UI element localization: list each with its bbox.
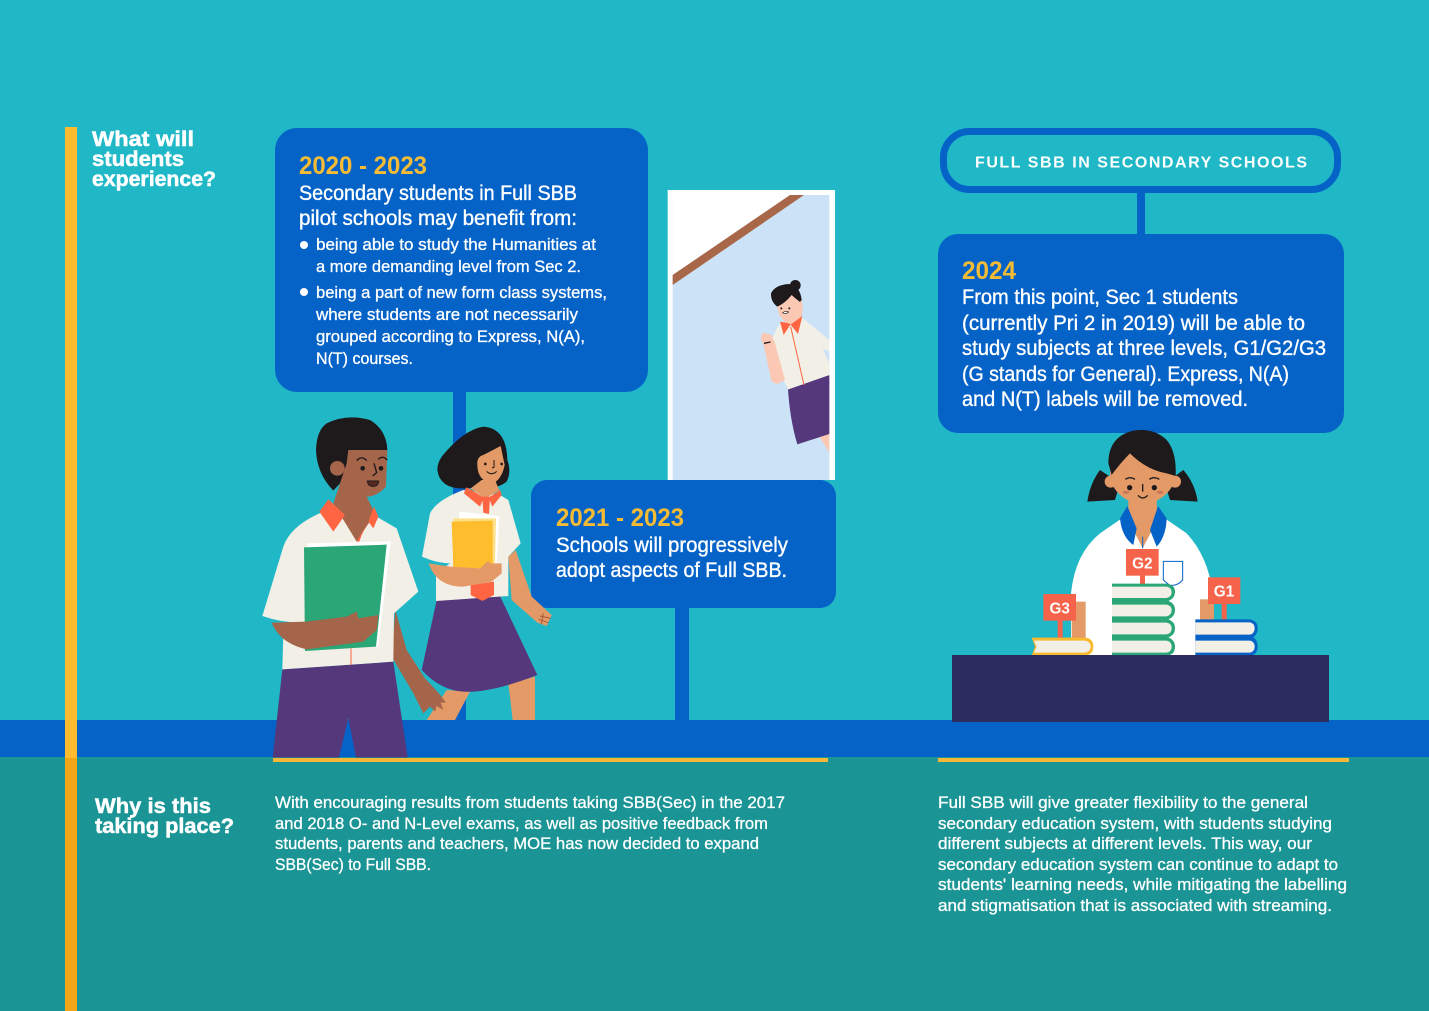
text block: reason for expansion: With encouraging results from students taking SBB(Sec) in the 2017 <box>275 793 785 812</box>
girl student <box>422 427 552 720</box>
callout: 2020 - 2023: a more demanding level from Sec 2. <box>316 257 581 276</box>
book stack G2 <box>1112 549 1175 656</box>
boy student <box>262 417 446 757</box>
text block: benefits of full SBB: secondary education system can continue to adapt to <box>938 855 1338 874</box>
desk <box>952 655 1329 722</box>
pill: full SBB in secondary schools: FULL SBB IN SECONDARY SCHOOLS <box>975 154 1307 172</box>
callout: 2024: 2024 <box>962 257 1016 285</box>
callout: 2024: and N(T) labels will be removed. <box>962 388 1248 411</box>
illustration: student with book stacks <box>1032 430 1258 656</box>
heading: why is this taking place: Why is this <box>95 795 211 818</box>
callout: 2020 - 2023: grouped according to Express, N(A), <box>316 327 585 346</box>
callout: 2021 - 2023: 2021 - 2023 <box>556 504 684 532</box>
book stack G3 <box>1032 594 1093 656</box>
callout: 2021 - 2023: adopt aspects of Full SBB. <box>556 559 787 582</box>
text block: reason for expansion <box>275 793 785 874</box>
heading: why is this taking place: taking place? <box>95 815 234 838</box>
callout: 2020 - 2023 <box>275 128 648 392</box>
text block: reason for expansion: SBB(Sec) to Full SBB. <box>275 855 431 874</box>
text block: reason for expansion: students, parents and teachers, MOE has now decided to expand <box>275 834 759 853</box>
callout: 2020 - 2023: Secondary students in Full SBB <box>299 182 577 205</box>
callout: 2020 - 2023: 2020 - 2023 <box>299 152 427 180</box>
connector: second callout to timeline <box>675 600 689 725</box>
text block: reason for expansion: and 2018 O- and N-Level exams, as well as positive feedback from <box>275 814 768 833</box>
callout: 2021 - 2023 <box>531 480 836 608</box>
vertical yellow rule <box>65 127 77 1011</box>
text block: benefits of full SBB: secondary education system, with students studying <box>938 814 1332 833</box>
text block: benefits of full SBB <box>938 793 1347 915</box>
callout: 2020 - 2023: being a part of new form class systems, <box>316 283 607 302</box>
heading: what will students experience: students <box>92 148 184 171</box>
pill: full SBB in secondary schools <box>944 132 1338 190</box>
callout: 2021 - 2023: Schools will progressively <box>556 534 788 557</box>
book stack G3: G3 <box>1049 600 1070 617</box>
bottom accent line right <box>938 758 1349 762</box>
connector: pill to 2024 callout <box>1137 188 1145 238</box>
heading: what will students experience <box>92 128 216 191</box>
book stack G1 <box>1195 577 1258 656</box>
heading: why is this taking place <box>95 795 234 838</box>
illustration: window with teacher <box>668 190 835 480</box>
callout: 2024: (currently Pri 2 in 2019) will be able to <box>962 312 1305 335</box>
callout: 2020 - 2023: N(T) courses. <box>316 349 413 368</box>
callout: 2020 - 2023: pilot schools may benefit from: <box>299 207 577 230</box>
girl with pigtails <box>1071 430 1214 655</box>
callout: 2020 - 2023: where students are not necessarily <box>315 305 578 324</box>
timeline band <box>0 720 1429 757</box>
text block: benefits of full SBB: students' learning needs, while mitigating the labelling <box>938 875 1347 894</box>
text block: benefits of full SBB: Full SBB will give greater flexibility to the general <box>938 793 1308 812</box>
text block: benefits of full SBB: different subjects at different levels. This way, our <box>938 834 1312 853</box>
heading: what will students experience: experience? <box>92 168 216 191</box>
connector: first callout to timeline <box>453 385 466 725</box>
illustration: two students walking <box>262 417 552 757</box>
callout: 2024 <box>938 234 1344 433</box>
callout: 2024: (G stands for General). Express, N(A) <box>962 363 1289 386</box>
callout: 2020 - 2023: being able to study the Humanities at <box>316 235 596 254</box>
heading: what will students experience: What will <box>92 128 194 151</box>
book stack G1: G1 <box>1214 584 1235 601</box>
book stack G2: G2 <box>1132 555 1153 572</box>
callout: 2024: From this point, Sec 1 students <box>962 286 1238 309</box>
text block: benefits of full SBB: and stigmatisation that is associated with streaming. <box>938 896 1332 915</box>
callout: 2024: study subjects at three levels, G1/G2/G3 <box>962 337 1326 360</box>
bottom accent line left <box>273 758 828 762</box>
